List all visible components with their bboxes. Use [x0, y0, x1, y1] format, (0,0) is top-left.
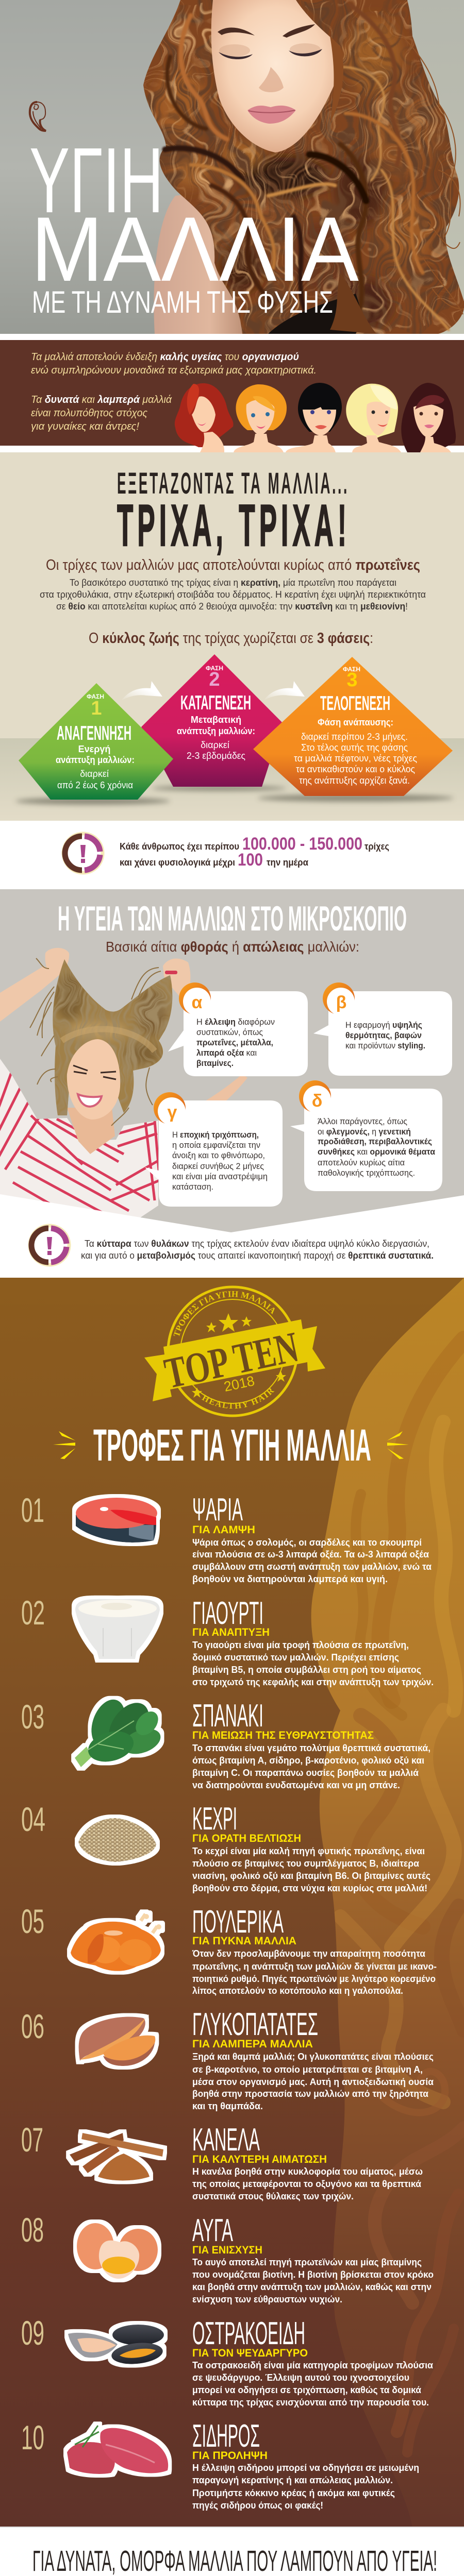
phase 3 diamond: Φάση ανάπαυσης: — [318, 717, 393, 727]
description: σε ψευδάργυρο. Έλλειψη αυτού του ιχνοστοιχείου — [192, 2372, 409, 2383]
callout text — [81, 1239, 434, 1261]
description: που ονομάζεται βιοτίνη. Η βιοτίνη βρίσκεται στον κρόκο — [192, 2269, 434, 2280]
stat callout — [63, 834, 389, 873]
stamp: top ten: TOP TEN — [160, 1323, 303, 1398]
item 10 iron: 10 — [21, 2418, 44, 2456]
stamp: top ten: 2018 — [222, 1373, 256, 1395]
bubble beta — [313, 982, 452, 1076]
item 05 poultry — [21, 1902, 437, 1996]
item 08 eggs: 08 — [21, 2211, 44, 2249]
bubble gamma — [145, 1092, 283, 1207]
arrow: phase 2 to 3 — [263, 681, 305, 701]
woman 2 orange hair — [234, 384, 287, 452]
bubble gamma: η οποία εμφανίζεται την — [172, 1140, 260, 1150]
bubble beta: Η εφαρμογή υψηλής — [345, 1020, 422, 1030]
shoulder — [154, 191, 247, 334]
item 03 spinach — [21, 1695, 430, 1790]
bubble delta: προδιάθεση, περιβαλλοντικές — [318, 1137, 432, 1146]
phase 3 diamond: 3 — [346, 669, 358, 691]
bubble delta: Άλλοι παράγοντες, όπως — [318, 1116, 407, 1126]
callout text: και για αυτό ο μεταβολισμός τους απαιτεί ικανοποιητική παροχή σε θρεπτικά συστατικά. — [81, 1250, 434, 1261]
description: βοηθούν να διατηρούνται λαμπερά και υγιή. — [192, 1574, 388, 1584]
item 03 spinach: ΣΠΑΝΑΚΙ — [192, 1698, 263, 1734]
intro band — [0, 340, 464, 452]
face — [67, 1039, 120, 1120]
panel: examining the hair — [0, 452, 464, 821]
small hair logo — [30, 102, 46, 131]
description: Όταν δεν προσλαμβάνουμε την απαραίτητη ποσότητα — [192, 1948, 425, 1959]
description: όπως βιταμίνη Α, σίδηρο, β-καροτένιο, φολικό οξύ και — [192, 1755, 424, 1766]
description: στο τριχωτό της κεφαλής και στην ανάπτυξη των τριχών. — [192, 1677, 434, 1688]
bubble delta: δ — [312, 1091, 322, 1111]
bubble gamma: άνοιξη και το φθινόπωρο, — [172, 1150, 265, 1160]
hero panel — [0, 0, 464, 334]
icon: salmon — [76, 1498, 157, 1543]
phase 2 diamond: ΚΑΤΑΓΕΝΕΣΗ — [180, 692, 251, 714]
description: πρωτεΐνης, η ανάπτυξη των μαλλιών δε γίνεται με ικανο- — [192, 1961, 437, 1972]
eyelid shadow — [219, 44, 250, 57]
icon: exclamation ring — [63, 834, 103, 873]
stamp: top ten — [144, 1286, 325, 1417]
item 06 sweet potatoes: ΓΛΥΚΟΠΑΤΑΤΕΣ — [192, 2007, 318, 2042]
stat text: και χάνει φυσιολογικά μέχρι — [120, 857, 235, 868]
white chevron callout — [0, 1194, 464, 1278]
item 08 eggs — [21, 2211, 434, 2304]
stat text: Κάθε άνθρωπος έχει περίπου — [120, 841, 239, 852]
woman 4 blond hair — [346, 384, 401, 452]
panel: top ten foods — [0, 1278, 464, 2527]
phase 2 diamond: Μεταβατική — [191, 715, 241, 725]
title: ΥΓΙΗ — [29, 129, 163, 232]
description: Τα οστρακοειδή είναι μία κατηγορία τροφίμων πλούσια — [192, 2360, 433, 2370]
item 06 sweet potatoes: 06 — [21, 2007, 44, 2045]
item 09 shellfish — [21, 2314, 433, 2408]
decorative hair — [311, 1278, 464, 2458]
phase 3 diamond — [253, 657, 453, 796]
description: μπορεί να οδηγήσει σε τριχόπτωση, καθώς τα δομικά — [192, 2385, 421, 2395]
item 07 cinnamon: ΚΑΝΕΛΑ — [192, 2122, 260, 2158]
description — [192, 1640, 434, 1688]
description: να διατηρούνται ενυδατωμένα και να μη σπάνε. — [192, 1780, 400, 1790]
protein text: Το βασικότερο συστατικό της τρίχας είναι η κερατίνη, μία πρωτεΐνη που παράγεται — [70, 578, 396, 588]
description: συστατικά στους θύλακες των τριχών. — [192, 2191, 354, 2201]
icon: millet seeds — [78, 1818, 156, 1862]
item 01 fish: 01 — [21, 1491, 44, 1529]
description: είναι πλούσια σε ω-3 λιπαρά οξέα. Τα ω-3 λιπαρά οξέα — [192, 1549, 429, 1560]
arrow: phase 1 to 2 — [121, 681, 162, 701]
item 10 iron — [21, 2418, 419, 2511]
phase 1 diamond: διαρκεί — [80, 769, 109, 779]
phase 2 diamond — [141, 654, 283, 787]
description: Η έλλειψη σιδήρου μπορεί να οδηγήσει σε μειωμένη — [192, 2463, 419, 2473]
panel: hair health under the microscope — [0, 889, 464, 1250]
item 02 yogurt: 02 — [21, 1594, 45, 1632]
phase 3 diamond: τα μαλλιά πέφτουν, νέες τρίχες — [294, 753, 417, 764]
item 01 fish: ΓΙΑ ΛΑΜΨΗ — [192, 1524, 255, 1536]
bubble delta: οι φλεγμονές, η γενετική — [318, 1127, 411, 1137]
stat text: την ημέρα — [267, 857, 308, 868]
bubble delta — [290, 1080, 442, 1191]
description: ενίσχυση των εύθραυστων νυχιών. — [192, 2294, 342, 2304]
description: σε β-καροτένιο, το οποίο μετατρέπεται σε βιταμίνη Α, — [192, 2064, 423, 2075]
description — [192, 2052, 434, 2111]
description: ποιητικό ρυθμό. Πηγές πρωτεϊνών με λιγότερο κορεσμένο — [192, 1974, 436, 1984]
panel: closing — [0, 2527, 464, 2576]
description — [192, 1846, 430, 1893]
description: μέσα στον οργανισμό μας. Αυτή η αντιοξειδωτική ουσία — [192, 2077, 434, 2088]
description: Το γιαούρτι είναι μία τροφή πλούσια σε πρωτεΐνη, — [192, 1640, 409, 1650]
icon: raw meat — [67, 2426, 168, 2474]
icon: cinnamon — [70, 2133, 163, 2180]
intro text — [31, 351, 317, 432]
item 09 shellfish: ΟΣΤΡΑΚΟΕΙΔΗ — [192, 2316, 305, 2351]
bubble delta: αποτελούν κυρίως αίτια — [318, 1158, 405, 1167]
hair strands across forehead — [330, 36, 343, 124]
phase 2 diamond: 2-3 εβδομάδες — [187, 751, 245, 761]
bubble delta: συνθήκες και ορμονικά θέματα — [318, 1147, 436, 1157]
item 10 iron: ΓΙΑ ΠΡΟΛΗΨΗ — [192, 2450, 268, 2462]
phase 2 diamond: ανάπτυξη μαλλιών: — [177, 726, 255, 737]
item 06 sweet potatoes — [21, 2007, 434, 2111]
neck — [67, 1108, 115, 1154]
intro text: είναι πολυπόθητος στόχος — [31, 408, 147, 419]
hair mass — [139, 0, 464, 334]
description: λίπος αποτελούν το κοτόπουλο και η γαλοπούλα. — [192, 1986, 403, 1996]
item 07 cinnamon — [21, 2121, 423, 2201]
bubble alpha: πρωτεΐνες, μέταλλα, — [196, 1038, 273, 1047]
phase 3 diamond: ΤΕΛΟΓΕΝΕΣΗ — [320, 692, 390, 715]
bubble alpha: λιπαρά οξέα και — [196, 1048, 257, 1058]
flyaway strands — [402, 36, 463, 314]
icon: yogurt bowl — [75, 1599, 160, 1659]
intro text: ενώ συμπληρώνουν μοναδικά τα εξωτερικά μας χαρακτηριστικά. — [31, 365, 317, 376]
woman 5 dark hair — [401, 383, 456, 452]
description — [192, 1537, 432, 1584]
lips — [247, 106, 296, 124]
bubble beta: και προϊόντων styling. — [345, 1041, 425, 1050]
item 02 yogurt — [21, 1594, 434, 1688]
item 08 eggs: ΑΥΓΑ — [192, 2213, 233, 2248]
stat text: 100.000 - 150.000 — [242, 834, 362, 854]
black top — [268, 294, 360, 334]
icon: oyster and mussel — [68, 2325, 164, 2366]
item 10 iron: ΣΙΔΗΡΟΣ — [192, 2418, 260, 2454]
protein text: στα τριχοθυλάκια, στην εξωτερική στοιβάδα του δέρματος. Η κερατίνη έχει υψηλή περιεκτικότητα — [40, 589, 426, 600]
bubble alpha: συστατικών, όπως — [196, 1027, 263, 1037]
item 04 millet: ΓΙΑ ΟΡΑΤΗ ΒΕΛΤΙΩΣΗ — [192, 1833, 301, 1844]
life cycle heading: Ο κύκλος ζωής της τρίχας χωρίζεται σε 3 φάσεις: — [89, 630, 373, 647]
intro text: Τα μαλλιά αποτελούν ένδειξη καλής υγείας του οργανισμού — [31, 351, 299, 363]
description — [192, 2166, 423, 2201]
item 06 sweet potatoes: ΓΙΑ ΛΑΜΠΕΡΑ ΜΑΛΛΙΑ — [192, 2038, 313, 2050]
description — [192, 1948, 437, 1996]
icon: roast chicken — [71, 1913, 161, 1971]
woman 3 black hair — [286, 383, 342, 452]
item 02 yogurt: ΓΙΑ ΑΝΑΠΤΥΞΗ — [192, 1626, 270, 1638]
stamp: top ten: ΤΡΟΦΕΣ ΓΙΑ ΥΓΙΗ ΜΑΛΛΙΑ — [173, 1291, 275, 1336]
item 04 millet: 04 — [21, 1800, 45, 1838]
description: νιασίνη, φολικό οξύ και βιταμίνη Β6. Οι βιταμίνες αυτές — [192, 1871, 430, 1882]
title — [31, 148, 359, 313]
description — [192, 1743, 430, 1790]
eyebrows — [218, 28, 255, 36]
bubble gamma: γ — [168, 1103, 177, 1122]
description — [192, 2257, 434, 2304]
sparks left — [53, 1431, 75, 1459]
phase 2 diamond: 2 — [209, 669, 220, 690]
item 03 spinach: ΓΙΑ ΜΕΙΩΣΗ ΤΗΣ ΕΥΘΡΑΥΣΤΟΤΗΤΑΣ — [192, 1730, 374, 1741]
bubble beta: β — [336, 993, 346, 1012]
item 07 cinnamon: 07 — [21, 2121, 43, 2159]
wisps — [30, 958, 161, 1126]
description: πλούσιο σε βιταμίνες του συμπλέγματος Β, ιδιαίτερα — [192, 1858, 419, 1869]
description: πηγές σιδήρου όπως οι φακές! — [192, 2500, 323, 2511]
description: Ψάρια όπως ο σολομός, οι σαρδέλες και το σκουμπρί — [192, 1537, 422, 1548]
icon: eggs — [77, 2223, 158, 2279]
description: δομικό συστατικό των μαλλιών. Περιέχει επίσης — [192, 1652, 399, 1663]
item 05 poultry: ΠΟΥΛΕΡΙΚΑ — [192, 1904, 284, 1940]
stat text — [120, 834, 389, 870]
title: ΜΕ ΤΗ ΔΥΝΑΜΗ ΤΗΣ ΦΥΣΗΣ — [32, 285, 333, 319]
bubble gamma: διαρκεί συνήθως 2 μήνες — [172, 1161, 264, 1171]
bubble alpha: βιταμίνες. — [196, 1058, 234, 1068]
item 09 shellfish: ΓΙΑ ΤΟΝ ΨΕΥΔΑΡΓΥΡΟ — [192, 2347, 308, 2359]
phase 3 diamond: διαρκεί περίπου 2-3 μήνες. — [301, 732, 408, 742]
woman 1 red hair — [175, 383, 234, 452]
nose — [259, 67, 284, 92]
bubble alpha: α — [192, 993, 203, 1012]
item 05 poultry: 05 — [21, 1902, 44, 1940]
protein text: Οι τρίχες των μαλλιών μας αποτελούνται κυρίως από πρωτεΐνες — [46, 557, 420, 573]
description: και τη θαμπάδα. — [192, 2101, 263, 2111]
phase 1 diamond: Ενεργή — [78, 744, 110, 754]
item 08 eggs: ΓΙΑ ΕΝΙΣΧΥΣΗ — [192, 2244, 262, 2256]
intro text: για γυναίκες και άντρες! — [31, 421, 139, 432]
item 09 shellfish: 09 — [21, 2314, 44, 2352]
hands — [45, 948, 69, 978]
blond hair — [53, 959, 172, 1115]
icon: sweet potatoes — [79, 2017, 155, 2066]
phase 1 diamond: ΦΑΣΗ — [87, 693, 104, 700]
icon: exclamation ring — [30, 1226, 69, 1265]
title: ΨΑΡΙΑ — [192, 1492, 243, 1528]
description: κύτταρα της τρίχας ενισχύονται από την παρουσία του. — [192, 2397, 429, 2408]
description — [192, 2360, 433, 2408]
sparks right — [387, 1431, 409, 1459]
bubble gamma: Η εποχική τριχόπτωση, — [172, 1130, 259, 1140]
item 02 yogurt: ΓΙΑΟΥΡΤΙ — [192, 1596, 263, 1631]
description: συμβάλλουν στη σωστή ανάπτυξη των μαλλιών, ενώ τα — [192, 1562, 432, 1572]
phase 1 diamond: 1 — [91, 698, 102, 719]
protein text: σε θείο και αποτελείται κυρίως από 2 θειούχα αμινοξέα: την κυστεΐνη και τη μεθειονίνη! — [56, 601, 408, 612]
ground shadows — [15, 786, 454, 805]
phase 1 diamond: ΑΝΑΓΕΝΝΗΣΗ — [57, 722, 131, 744]
bubble beta: θερμότητας, βαφών — [345, 1030, 422, 1040]
description — [192, 2463, 419, 2511]
item 05 poultry: ΓΙΑ ΠΥΚΝΑ ΜΑΛΛΙΑ — [192, 1935, 296, 1947]
phase 1 diamond: από 2 έως 6 χρόνια — [57, 780, 133, 790]
shirt — [0, 1059, 158, 1217]
phase 2 diamond: διαρκεί — [201, 740, 229, 750]
description: βοηθά στην προστασία των μαλλιών από την ξηρότητα — [192, 2089, 428, 2099]
item 01 fish — [21, 1491, 432, 1584]
description: Ξηρά και θαμπά μαλλιά; Οι γλυκοπατάτες είναι πλούσιες — [192, 2052, 434, 2062]
subheading: Βασικά αίτια φθοράς ή απώλειας μαλλιών: — [106, 939, 359, 955]
description: της οποίας μεταφέρονται το οξυγόνο και τα θρεπτικά — [192, 2179, 421, 2190]
description: βιταμίνη C. Οι παραπάνω ουσίες βοηθούν τα μαλλιά — [192, 1768, 419, 1778]
phase 3 diamond: της ανάπτυξης αρχίζει ξανά. — [299, 775, 410, 786]
bubble alpha: Η έλλειψη διαφόρων — [196, 1017, 275, 1027]
intro text: Τα δυνατά και λαμπερά μαλλιά — [31, 394, 172, 405]
hair locks over top — [330, 273, 376, 334]
item 03 spinach: 03 — [21, 1698, 44, 1736]
phase 3 diamond: Στο τέλος αυτής της φάσης — [301, 742, 408, 753]
description: παραγωγή κερατίνης ή και απώλειας μαλλιών. — [192, 2475, 393, 2485]
phase 1 diamond: ανάπτυξη μαλλιών: — [56, 755, 135, 766]
description: Το αυγό αποτελεί πηγή πρωτεϊνών και μίας βιταμίνης — [192, 2257, 422, 2267]
heading — [117, 467, 351, 558]
photo: woman pulling her hair — [0, 948, 247, 1226]
description: Προτιμήστε κόκκινο κρέας ή ακόμα και φυτικές — [192, 2488, 395, 2498]
protein text — [40, 557, 426, 612]
title: ΜΑΛΛΙΑ — [31, 198, 359, 300]
description: και βοηθά στην ανάπτυξη των μαλλιών, καθώς και στην — [192, 2282, 432, 2293]
bubble gamma: και είναι μία αναστρέψιμη — [172, 1172, 268, 1181]
arms — [0, 966, 58, 1022]
description: βοηθούν στο δέρμα, στα νύχια και κυρίως στα μαλλιά! — [192, 1883, 427, 1893]
squeezed eyes — [73, 1065, 116, 1079]
face — [211, 0, 341, 152]
stat text: τρίχες — [364, 841, 389, 852]
closed eyes — [219, 52, 253, 59]
cartoon women — [175, 383, 456, 452]
item 04 millet — [21, 1800, 430, 1893]
item 07 cinnamon: ΓΙΑ ΚΑΛΥΤΕΡΗ ΑΙΜΑΤΩΣΗ — [192, 2154, 327, 2165]
teeth and lips — [78, 1094, 102, 1107]
bubble alpha — [168, 982, 308, 1076]
stamp: top ten: HEALTHY HAIR — [202, 1388, 274, 1409]
description: Η κανέλα βοηθά στην κυκλοφορία του αίματος, μέσω — [192, 2166, 423, 2177]
phase 1 diamond — [19, 683, 173, 800]
bubble gamma: κατάσταση. — [172, 1182, 213, 1192]
phase 3 diamond: τα αντικαθιστούν και ο κύκλος — [296, 764, 415, 774]
callout text: Τα κύτταρα των θυλάκων της τρίχας εκτελούν έναν ιδιαίτερα υψηλό κύκλο διεργασιών, — [85, 1239, 429, 1249]
stat text: 100 — [238, 850, 263, 870]
description: βιταμίνη Β5, η οποία συμβάλλει στη ροή του αίματος — [192, 1665, 421, 1675]
description: Το κεχρί είναι μία καλή πηγή φυτικής πρωτεΐνης, είναι — [192, 1846, 425, 1856]
description: Το σπανάκι είναι γεμάτο πολύτιμα θρεπτικά συστατικά, — [192, 1743, 430, 1753]
phase 3 diamond: ΦΑΣΗ — [343, 666, 360, 673]
bubble delta: παθολογικής τριχόπτωσης. — [318, 1168, 415, 1178]
icon: spinach — [75, 1695, 164, 1767]
phase 2 diamond: ΦΑΣΗ — [206, 665, 223, 672]
item 04 millet: ΚΕΧΡΙ — [192, 1801, 237, 1837]
